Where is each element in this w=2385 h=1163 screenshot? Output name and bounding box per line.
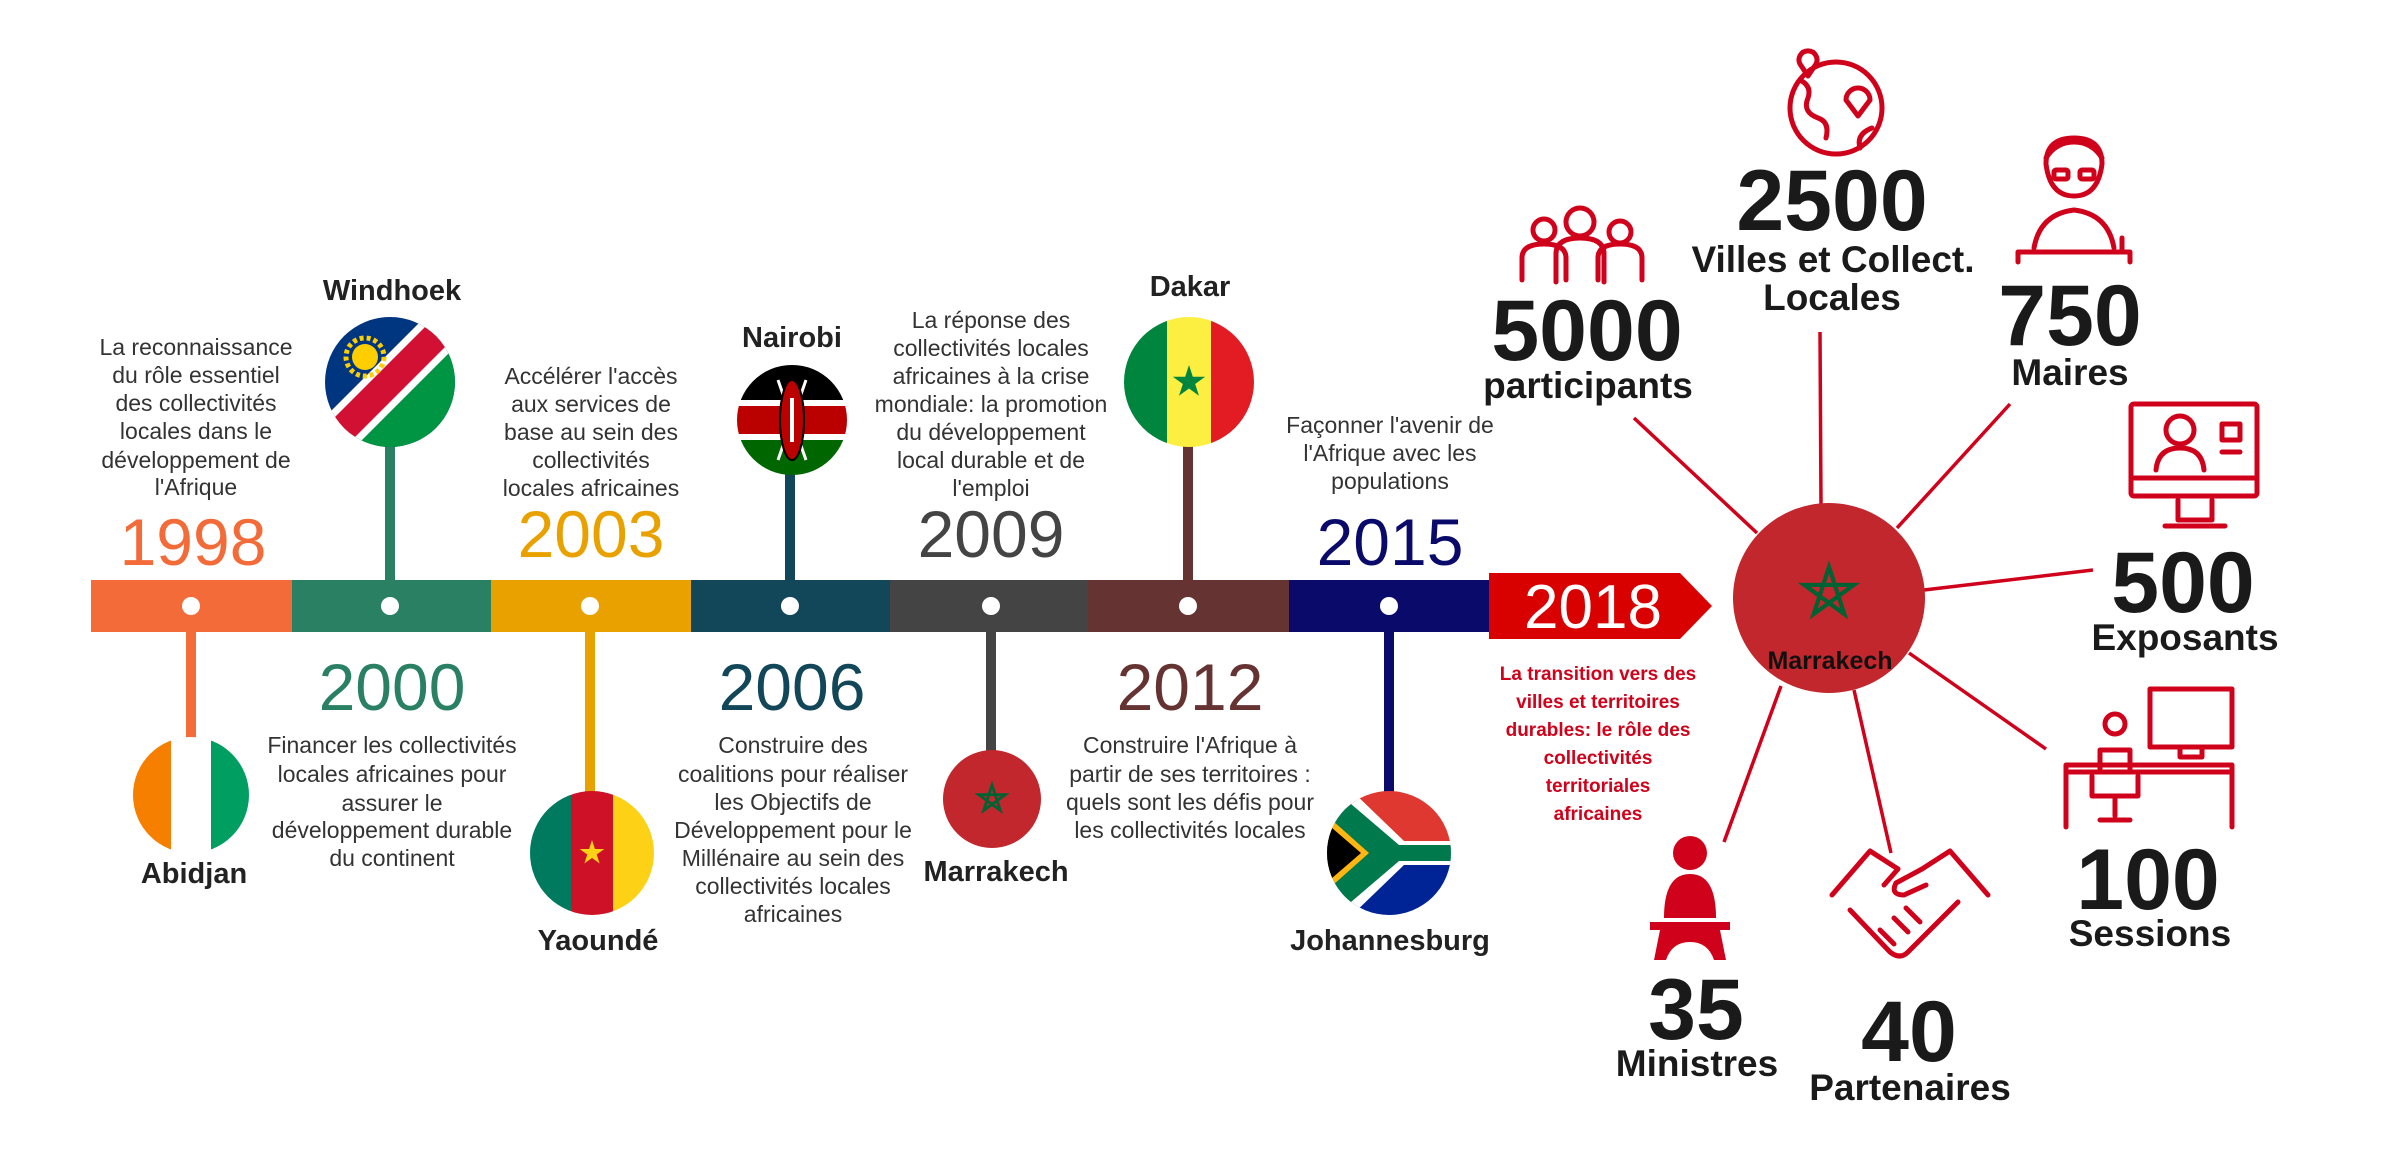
milestone 2006: coalitions pour réaliser xyxy=(678,761,908,787)
milestone 2015: populations xyxy=(1331,468,1449,494)
milestone 2015: l'Afrique avec les xyxy=(1303,440,1477,466)
milestone 2006: Nairobi xyxy=(742,322,842,354)
milestone 2006: les Objectifs de xyxy=(714,789,872,815)
stat: 5000 participants: participants xyxy=(1483,365,1693,406)
stat: 500 exposants: 500 xyxy=(2111,535,2255,631)
milestone 2000 xyxy=(267,275,517,871)
milestone 2012: partir de ses territoires : xyxy=(1069,761,1311,787)
milestone 2015 xyxy=(1286,412,1494,957)
stat: 35 ministres xyxy=(1616,836,1778,1084)
milestone 2006: Construire des xyxy=(718,732,868,758)
milestone 2018 arrow: villes et territoires xyxy=(1516,692,1680,713)
stat: 2500 villes: 2500 xyxy=(1736,153,1928,249)
milestone 1998: 1998 xyxy=(120,505,266,579)
milestone 2018 arrow xyxy=(1489,573,1712,825)
milestone 2003: base au sein des xyxy=(504,419,678,445)
stat: 750 maires: 750 xyxy=(1998,268,2142,364)
milestone 2009: 2009 xyxy=(918,497,1064,571)
milestone 2003: aux services de xyxy=(511,391,671,417)
milestone 1998: du rôle essentiel xyxy=(112,362,280,388)
milestone 2012: les collectivités locales xyxy=(1074,817,1306,843)
connector lines xyxy=(1634,332,2093,853)
milestone 2000: assurer le xyxy=(342,790,442,816)
milestone 2009: mondiale: la promotion xyxy=(875,391,1107,417)
milestone 2003: Yaoundé xyxy=(538,925,658,957)
milestone 2009: La réponse des xyxy=(912,307,1070,333)
milestone 2000: développement durable xyxy=(272,817,512,843)
milestone 2009: collectivités locales xyxy=(893,335,1089,361)
milestone 2006: Millénaire au sein des xyxy=(682,845,904,871)
milestone 2012: Construire l'Afrique à xyxy=(1083,732,1297,758)
milestone 2012: quels sont les défis pour xyxy=(1066,789,1314,815)
milestone 1998: locales dans le xyxy=(120,418,272,444)
milestone 2006: collectivités locales xyxy=(695,873,891,899)
milestone 2009: Marrakech xyxy=(923,856,1069,888)
stat: 35 ministres: 35 xyxy=(1648,962,1744,1058)
stat: 100 sessions: 100 xyxy=(2076,832,2220,928)
milestone 2018 arrow: 2018 xyxy=(1524,573,1662,642)
milestone 2000: du continent xyxy=(329,845,455,871)
hub: Marrakech: Marrakech xyxy=(1767,647,1893,675)
milestone 2012: 2012 xyxy=(1117,650,1263,724)
milestone 2009: du développement xyxy=(896,419,1086,445)
milestone 2018 arrow: La transition vers des xyxy=(1500,664,1696,685)
milestone 1998: La reconnaissance xyxy=(99,334,293,360)
milestone 1998 xyxy=(99,334,293,890)
stat: 40 partenaires: 40 xyxy=(1861,984,1957,1080)
stat: 100 sessions: Sessions xyxy=(2069,913,2231,954)
milestone 2009: local durable et de xyxy=(897,447,1085,473)
milestone 1998: des collectivités xyxy=(115,390,277,416)
milestone 1998: Abidjan xyxy=(141,858,247,890)
milestone 2003: 2003 xyxy=(518,497,664,571)
milestone 2015: Johannesburg xyxy=(1290,925,1490,957)
stat: 500 exposants: Exposants xyxy=(2091,617,2279,658)
milestone 2006: africaines xyxy=(744,901,842,927)
milestone 2018 arrow: durables: le rôle des xyxy=(1506,720,1690,741)
milestone 2012: Dakar xyxy=(1150,271,1230,303)
milestone 2009 xyxy=(875,307,1107,888)
milestone 2015: Façonner l'avenir de xyxy=(1286,412,1494,438)
milestone 2000: Financer les collectivités xyxy=(267,732,517,758)
stat: 5000 participants: 5000 xyxy=(1491,283,1683,379)
stat: 2500 villes: Villes et Collect. xyxy=(1691,239,1975,280)
milestone 2000: Windhoek xyxy=(323,275,462,307)
milestone 1998: l'Afrique xyxy=(155,474,237,500)
milestone 2006: Développement pour le xyxy=(674,817,912,843)
milestone 2006 xyxy=(674,322,912,927)
milestone 2018 arrow: territoriales xyxy=(1546,776,1650,797)
stat: 2500 villes: Locales xyxy=(1763,277,1901,318)
stat: 35 ministres: Ministres xyxy=(1616,1043,1778,1084)
timeline bar xyxy=(91,580,1499,632)
stat: 40 partenaires xyxy=(1809,851,2011,1108)
stems xyxy=(186,446,1394,794)
hub: Marrakech xyxy=(1733,503,1925,693)
milestone 2018 arrow: africaines xyxy=(1554,804,1642,825)
milestone 2009: africaines à la crise xyxy=(893,363,1089,389)
stat: 750 maires xyxy=(1998,138,2142,393)
milestone 2018 arrow: collectivités xyxy=(1544,748,1652,769)
milestone 2003: collectivités xyxy=(532,447,650,473)
milestone 2000: locales africaines pour xyxy=(278,761,507,787)
stat: 100 sessions xyxy=(2066,689,2232,954)
stat: 5000 participants xyxy=(1483,208,1693,406)
milestone 2015: 2015 xyxy=(1317,505,1463,579)
milestone 2003: locales africaines xyxy=(503,475,679,501)
milestone 2009: l'emploi xyxy=(952,475,1030,501)
milestone 2000: 2000 xyxy=(319,650,465,724)
milestone 1998: développement de xyxy=(101,447,291,473)
milestone 2003 xyxy=(503,363,679,957)
stat: 750 maires: Maires xyxy=(2011,352,2129,393)
milestone 2012 xyxy=(1066,271,1314,843)
stat: 2500 villes xyxy=(1691,51,1975,318)
milestone 2006: 2006 xyxy=(719,650,865,724)
stat: 500 exposants xyxy=(2091,404,2279,658)
stat: 40 partenaires: Partenaires xyxy=(1809,1067,2011,1108)
milestone 2003: Accélérer l'accès xyxy=(504,363,678,389)
